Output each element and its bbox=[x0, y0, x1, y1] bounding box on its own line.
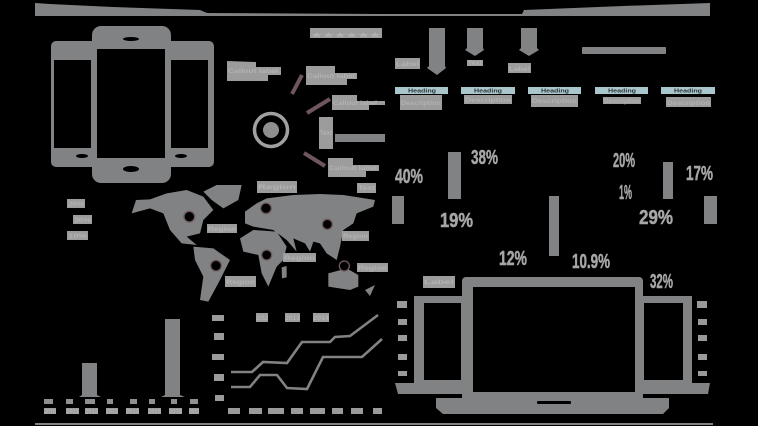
panel: app callouts bbox=[227, 61, 385, 177]
column 4: Heading bbox=[608, 88, 636, 94]
bar 2 bbox=[161, 319, 185, 397]
label: South America: Region bbox=[226, 280, 255, 286]
panel: five column headers bbox=[395, 87, 715, 110]
callout text 1: Callout label bbox=[228, 69, 278, 75]
New Zealand bbox=[365, 285, 375, 296]
left laptop bbox=[395, 296, 464, 394]
right phone bbox=[164, 41, 214, 167]
marker: Africa bbox=[262, 250, 272, 260]
x axis labels bbox=[228, 408, 382, 414]
value 10.9%: 10.9% bbox=[572, 251, 610, 273]
arrow: lower callout bbox=[304, 153, 325, 166]
right scale labels bbox=[697, 301, 707, 376]
world map bbox=[132, 185, 375, 302]
legend value 2: 30% bbox=[74, 218, 92, 224]
arrow 2 bbox=[465, 28, 484, 56]
icon: target circle bbox=[254, 114, 288, 146]
callout text 5: Callout label bbox=[329, 166, 377, 172]
category labels: 2010 bbox=[44, 410, 57, 416]
value 17%: 17% bbox=[686, 163, 713, 185]
star rating row: ★★★★★★ bbox=[311, 32, 382, 39]
panel: percentage bars: 1% bbox=[619, 182, 632, 204]
column 3: Heading bbox=[541, 88, 569, 94]
centre laptop bbox=[436, 277, 669, 414]
Madagascar bbox=[282, 266, 287, 278]
label: Asia: Region bbox=[343, 234, 368, 240]
callout text 1 bbox=[227, 61, 281, 81]
label: North America: Region bbox=[208, 227, 236, 233]
value 19%: 19% bbox=[440, 210, 473, 232]
marker: Asia bbox=[322, 219, 332, 229]
left scale labels bbox=[397, 301, 407, 376]
label: North America bbox=[207, 224, 237, 233]
Africa bbox=[240, 230, 287, 287]
column 2 bbox=[461, 87, 515, 104]
column 4 bbox=[595, 87, 648, 105]
value 32%: 32% bbox=[650, 271, 673, 293]
horizontal bar bbox=[335, 134, 385, 142]
category labels bbox=[44, 408, 199, 416]
legend percentages bbox=[67, 199, 92, 240]
column 5: Description bbox=[667, 101, 710, 107]
series labels: 2013 bbox=[285, 316, 301, 322]
right laptop bbox=[641, 296, 710, 394]
horizontal bar bbox=[582, 47, 666, 54]
arrow label 3 bbox=[508, 63, 531, 73]
top banner wedge bbox=[35, 3, 710, 16]
series labels: 2012 bbox=[256, 316, 269, 322]
column 5: Heading bbox=[674, 88, 702, 94]
category labels: 2015 bbox=[148, 410, 162, 416]
callout text 3: Callout label bbox=[333, 101, 377, 107]
map labels bbox=[207, 181, 388, 287]
bar 1 bbox=[79, 363, 101, 397]
series B bbox=[231, 339, 382, 389]
bar 17% bbox=[663, 162, 673, 199]
callout text 2: Callout label bbox=[307, 74, 355, 80]
arrow label 1: Label bbox=[396, 62, 419, 68]
callout text 5 bbox=[328, 158, 379, 177]
North America bbox=[132, 190, 213, 245]
value 38%: 38% bbox=[471, 147, 498, 169]
arrow label 3: Label bbox=[509, 67, 530, 73]
column 3: Description bbox=[532, 99, 577, 105]
column 2: Description bbox=[465, 98, 511, 104]
laptop label left: Label bbox=[424, 280, 455, 286]
series labels: 2014 bbox=[313, 316, 330, 322]
callout text 3 bbox=[332, 95, 385, 110]
marker: North America bbox=[184, 211, 195, 222]
column 2: Heading bbox=[474, 88, 502, 94]
panel: download arrows bbox=[395, 28, 666, 75]
category labels: 2013 bbox=[106, 410, 119, 416]
laptop label left bbox=[423, 276, 455, 288]
marker: Europe bbox=[261, 203, 271, 214]
marker: South America bbox=[211, 260, 221, 271]
callout text 4 bbox=[319, 117, 333, 149]
Eurasia bbox=[245, 194, 375, 260]
legend value 3: 10% bbox=[68, 234, 88, 240]
column 1 bbox=[395, 87, 448, 110]
label: Europe: Region bbox=[258, 185, 297, 191]
label: Africa: Region bbox=[284, 256, 315, 262]
column 4: Description bbox=[604, 99, 640, 105]
bar 40% bbox=[392, 196, 404, 224]
icon: three laptops bbox=[395, 276, 710, 414]
value 12%: 12% bbox=[499, 248, 527, 270]
line chart bbox=[212, 313, 382, 414]
value 20%: 20% bbox=[613, 150, 635, 172]
icon: three smartphones bbox=[51, 26, 214, 183]
arrow: middle callout bbox=[307, 99, 330, 113]
legend value 1: 20% bbox=[68, 202, 85, 208]
label: top right bbox=[357, 183, 376, 193]
category labels: 2012 bbox=[85, 410, 99, 416]
panel: percentage bars bbox=[392, 147, 717, 293]
value labels bbox=[44, 399, 198, 404]
column 1: Heading bbox=[408, 88, 436, 94]
label: Asia bbox=[342, 231, 369, 241]
bar 12% bbox=[549, 196, 559, 256]
bar 29% bbox=[704, 196, 717, 224]
arrow: upper callout bbox=[292, 75, 302, 94]
bar chart bbox=[44, 319, 199, 416]
category labels: 2016 bbox=[169, 410, 183, 416]
series labels bbox=[256, 313, 330, 322]
arrow 3 bbox=[519, 28, 539, 56]
series A bbox=[231, 315, 378, 372]
arrow label 2: Text bbox=[468, 61, 482, 67]
label: Oceania bbox=[357, 263, 388, 272]
marker: Oceania bbox=[339, 261, 349, 271]
category labels: 2017 bbox=[189, 410, 199, 416]
left phone bbox=[51, 41, 101, 167]
column 3 bbox=[528, 87, 581, 107]
centre phone bbox=[92, 26, 171, 183]
Greenland bbox=[203, 185, 242, 208]
column 1: Description bbox=[401, 101, 441, 107]
star rating row bbox=[310, 28, 382, 39]
column 5 bbox=[661, 87, 715, 107]
arrow 1 bbox=[427, 28, 446, 75]
arrow label 1 bbox=[395, 58, 420, 69]
label: South America bbox=[225, 276, 256, 287]
Australia bbox=[328, 268, 358, 290]
bottom rule bbox=[35, 423, 713, 425]
callout text 2 bbox=[306, 66, 357, 85]
label: top right: Text bbox=[358, 186, 375, 192]
y axis labels bbox=[212, 315, 224, 401]
bar 19% bbox=[448, 152, 461, 199]
arrow label 2 bbox=[467, 60, 483, 67]
category labels: 2011 bbox=[66, 410, 80, 416]
label: Africa bbox=[283, 253, 316, 262]
value 40%: 40% bbox=[395, 166, 423, 188]
callout text 4: Text bbox=[320, 131, 332, 137]
South America bbox=[193, 247, 230, 302]
label: Oceania: Region bbox=[358, 266, 387, 272]
label: Europe bbox=[257, 181, 297, 193]
value 29%: 29% bbox=[639, 207, 673, 229]
category labels: 2014 bbox=[126, 410, 140, 416]
